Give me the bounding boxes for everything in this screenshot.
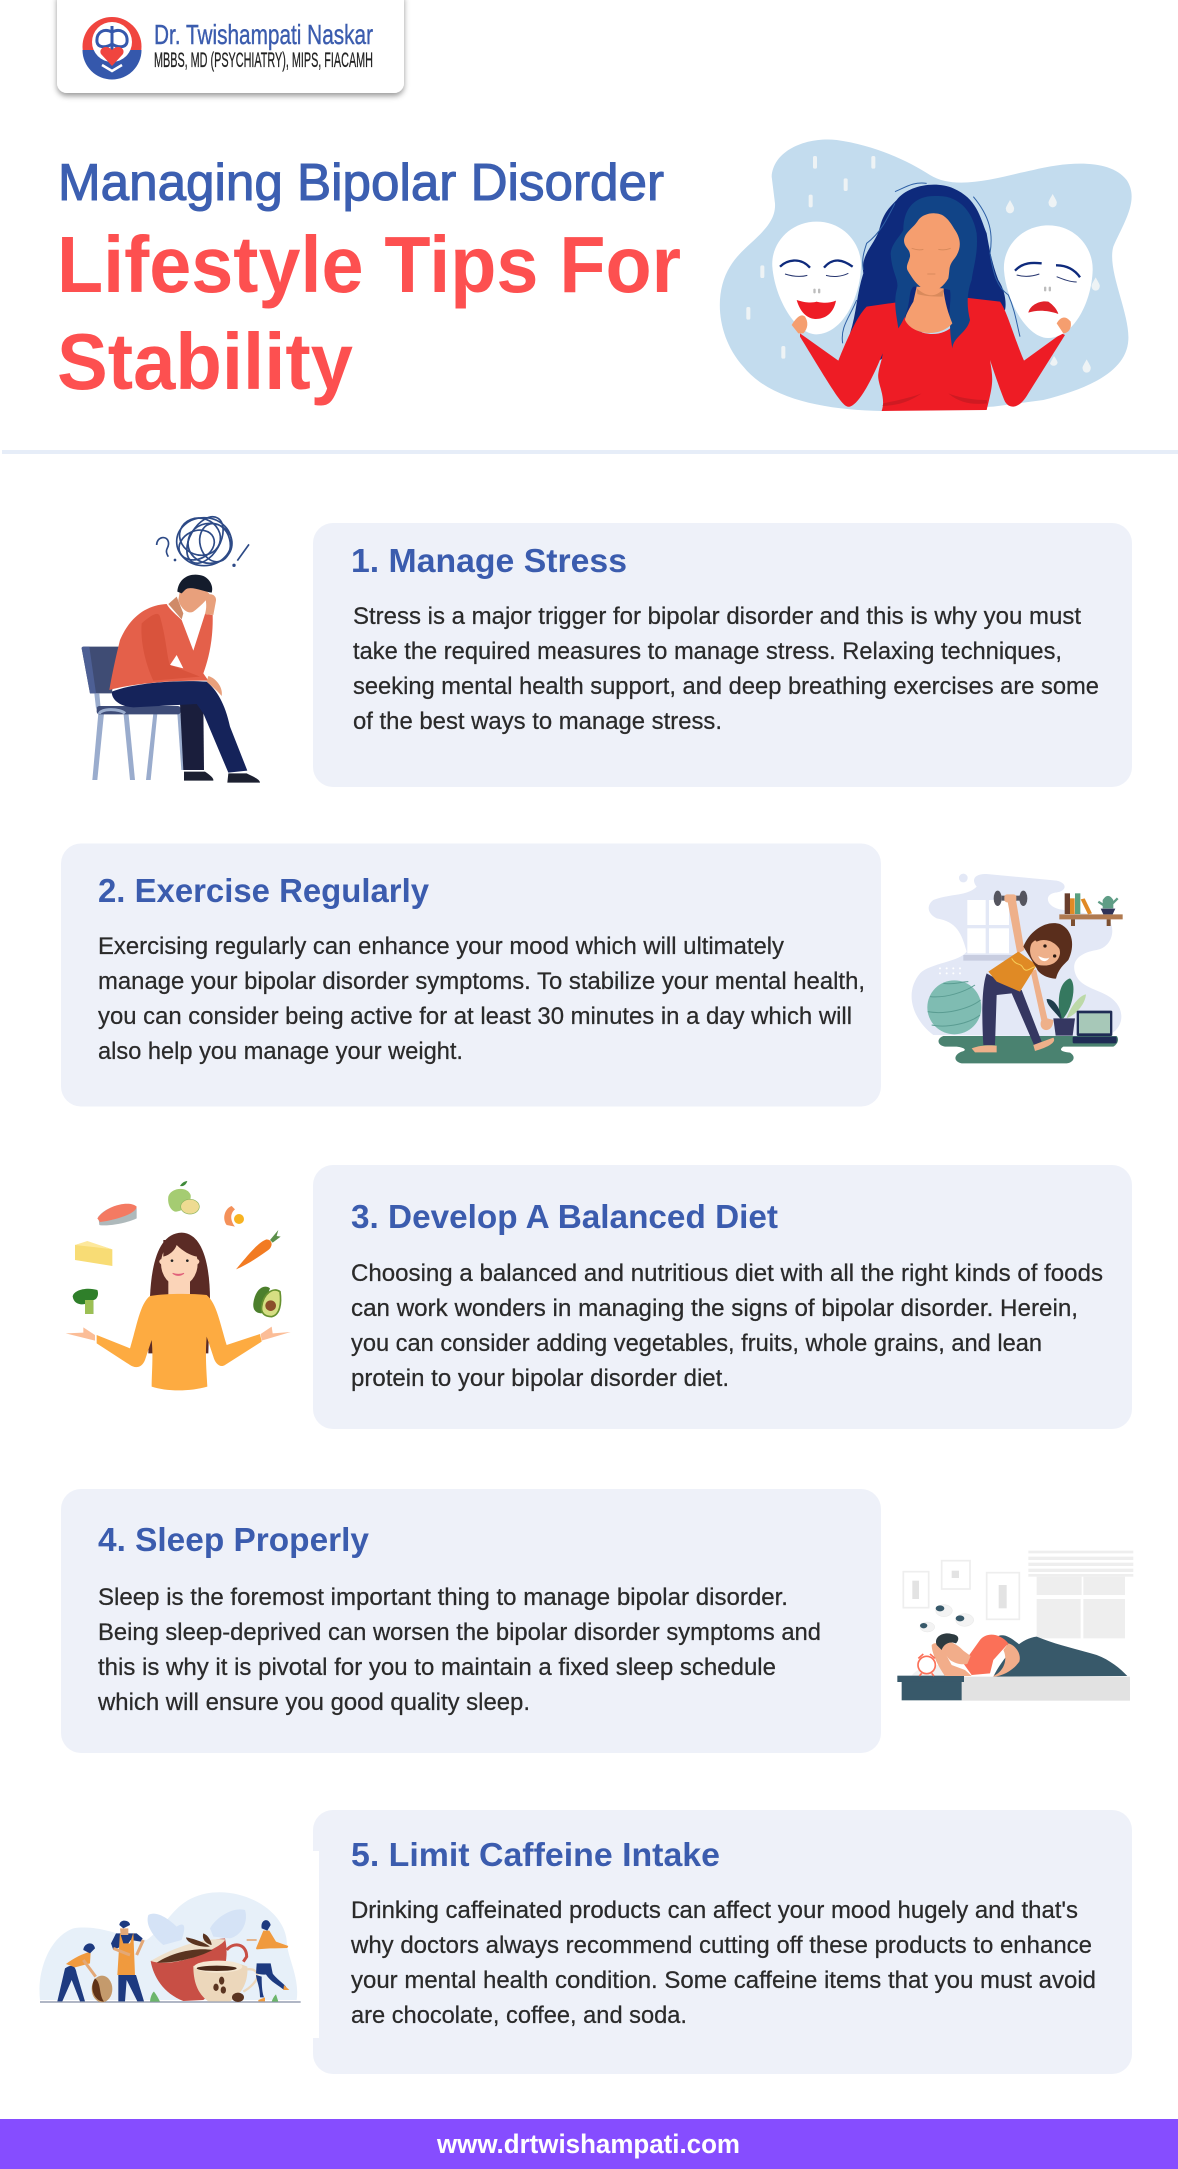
text: balanced diet body: protein to your bipolar disorder diet. (351, 1365, 729, 1392)
footer bar (0, 2119, 1178, 2169)
heading: exercise regularly: 2. Exercise Regularly (98, 872, 430, 909)
panel: limit caffeine intake (313, 1810, 1132, 2074)
text: balanced diet body: you can consider adding vegetables, fruits, whole grains, and lean (351, 1330, 1042, 1357)
text: sleep properly body (97, 1584, 821, 1716)
text: sleep properly body: this is why it is pivotal for you to maintain a fixed sleep schedule (98, 1654, 776, 1681)
illustration: woman holding happy and sad masks (720, 139, 1132, 411)
logo name: Dr. Twishampati Naskar (154, 19, 373, 50)
text: manage stress body: Stress is a major trigger for bipolar disorder and this is why you must (353, 603, 1081, 630)
text: manage stress body: seeking mental health support, and deep breathing exercises are some (353, 673, 1099, 700)
title line: main 2: Stability (57, 317, 353, 406)
text: balanced diet body (351, 1260, 1103, 1392)
text: limit caffeine body: Drinking caffeinated products can affect your mood hugely and that's (351, 1897, 1078, 1924)
text: limit caffeine body: why doctors always recommend cutting off these products to enhance (350, 1932, 1092, 1959)
text: limit caffeine body: are chocolate, coffee, and soda. (351, 2002, 687, 2029)
logo card (57, 0, 404, 93)
text: sleep properly body: which will ensure you good quality sleep. (97, 1689, 530, 1716)
text: exercise regularly body: you can consider being active for at least 30 minutes in a day which will (98, 1003, 852, 1030)
text: exercise regularly body (98, 933, 865, 1065)
text: manage stress body (353, 603, 1099, 735)
illustration: man sleeping in bed (897, 1551, 1133, 1701)
text: sleep properly body: Sleep is the foremost important thing to manage bipolar disorder. (98, 1584, 788, 1611)
title (57, 154, 681, 406)
illustration: woman exercising at home (912, 874, 1123, 1063)
illustration: woman surrounded by healthy foods (66, 1181, 291, 1390)
illustration: baristas and coffee cups (39, 1892, 301, 2003)
divider (2, 450, 1178, 454)
panel: exercise regularly (61, 844, 881, 1106)
icon: brain and heart logo (82, 17, 142, 80)
logo credentials: MBBS, MD (PSYCHIATRY), MIPS, FIACAMH (154, 49, 373, 72)
text: exercise regularly body: Exercising regularly can enhance your mood which will ultimately (98, 933, 784, 960)
panel: manage stress (313, 523, 1132, 787)
text: manage stress body: take the required measures to manage stress. Relaxing techniques, (353, 638, 1062, 665)
heading: manage stress: 1. Manage Stress (351, 542, 627, 579)
panel: sleep properly (61, 1489, 881, 1753)
heading: sleep properly: 4. Sleep Properly (98, 1521, 370, 1558)
heading: balanced diet: 3. Develop A Balanced Diet (351, 1198, 778, 1235)
title line: subtitle: Managing Bipolar Disorder (58, 154, 664, 212)
text: manage stress body: of the best ways to manage stress. (353, 708, 722, 735)
text: limit caffeine body (350, 1897, 1096, 2029)
heading: limit caffeine intake: 5. Limit Caffeine Intake (351, 1836, 720, 1873)
illustration: stressed man on chair (82, 511, 260, 783)
panel: balanced diet (313, 1165, 1132, 1429)
text: exercise regularly body: manage your bipolar disorder symptoms. To stabilize your mental health, (98, 968, 865, 995)
footer url: www.drtwishampati.com (436, 2129, 740, 2159)
text: balanced diet body: can work wonders in managing the signs of bipolar disorder. Herein, (351, 1295, 1078, 1322)
text: exercise regularly body: also help you manage your weight. (98, 1038, 463, 1065)
title line: main 1: Lifestyle Tips For (57, 220, 681, 309)
text: limit caffeine body: your mental health condition. Some caffeine items that you must avoid (351, 1967, 1096, 1994)
text: balanced diet body: Choosing a balanced and nutritious diet with all the right kinds of foods (351, 1260, 1103, 1287)
text: sleep properly body: Being sleep-deprived can worsen the bipolar disorder symptoms and (98, 1619, 821, 1646)
